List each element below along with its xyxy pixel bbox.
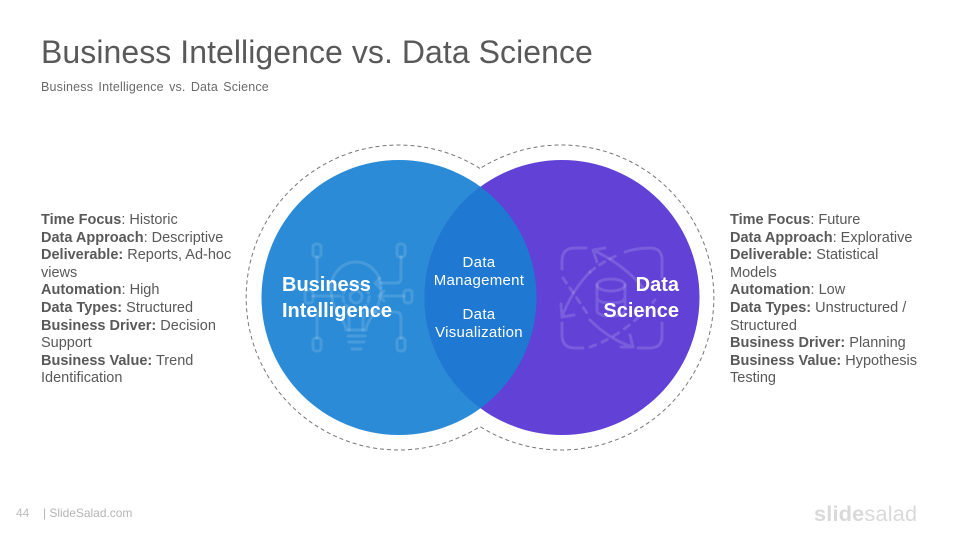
footer text: | SlideSalad.com xyxy=(43,506,132,520)
label: data science: Data xyxy=(636,274,679,296)
label: data science: Science xyxy=(603,300,679,322)
overlap text: data visualization: Data xyxy=(463,306,495,323)
overlap region xyxy=(424,186,536,408)
overlap text: data visualization xyxy=(435,306,523,341)
panel: business intelligence attributes: Business Driver: Decision xyxy=(41,318,216,334)
panel: business intelligence attributes: Data Types: Structured xyxy=(41,300,193,316)
label: data science xyxy=(603,274,680,322)
panel: data science attributes: Data Approach: Explorative xyxy=(730,230,912,246)
panel: business intelligence attributes: Time Focus: Historic xyxy=(41,212,178,228)
label: business intelligence: Business xyxy=(282,274,371,296)
circle: data science xyxy=(424,160,700,435)
icon: light bulb circuit xyxy=(305,244,412,351)
panel: business intelligence attributes: Deliverable: Reports, Ad-hoc xyxy=(41,247,231,263)
dashed outline xyxy=(246,145,714,450)
panel: data science attributes: Deliverable: Statistical xyxy=(730,247,878,263)
panel: business intelligence attributes: Support xyxy=(41,335,92,351)
panel: data science attributes xyxy=(730,212,917,386)
panel: business intelligence attributes xyxy=(41,212,231,386)
panel: business intelligence attributes: Data Approach: Descriptive xyxy=(41,230,223,246)
venn diagram xyxy=(246,144,714,450)
page number: 44 xyxy=(16,506,29,520)
overlap text: data management xyxy=(434,254,524,289)
panel: business intelligence attributes: views xyxy=(41,265,77,281)
overlap text: data management: Management xyxy=(434,272,524,289)
panel: data science attributes: Automation: Low xyxy=(730,282,845,298)
panel: data science attributes: Structured xyxy=(730,318,797,334)
overlap text: data management: Data xyxy=(463,254,495,271)
panel: data science attributes: Business Value: Hypothesis xyxy=(730,353,917,369)
panel: data science attributes: Business Driver: Planning xyxy=(730,335,906,351)
label: business intelligence: Intelligence xyxy=(282,300,392,322)
icon: data cycle database xyxy=(561,248,662,348)
panel: business intelligence attributes: Identification xyxy=(41,370,122,386)
label: business intelligence xyxy=(282,274,392,322)
title: Business Intelligence vs. Data Science xyxy=(41,34,593,70)
circle: business intelligence xyxy=(262,160,536,435)
overlap text: data visualization: Visualization xyxy=(435,324,523,341)
panel: data science attributes: Testing xyxy=(730,370,776,386)
panel: business intelligence attributes: Automation: High xyxy=(41,282,159,298)
panel: data science attributes: Data Types: Unstructured / xyxy=(730,300,906,316)
panel: business intelligence attributes: Business Value: Trend xyxy=(41,353,193,369)
panel: data science attributes: Time Focus: Future xyxy=(730,212,860,228)
subtitle: Business Intelligence vs. Data Science xyxy=(41,80,269,94)
logo wordmark: slidesalad xyxy=(814,501,917,526)
panel: data science attributes: Models xyxy=(730,265,777,281)
